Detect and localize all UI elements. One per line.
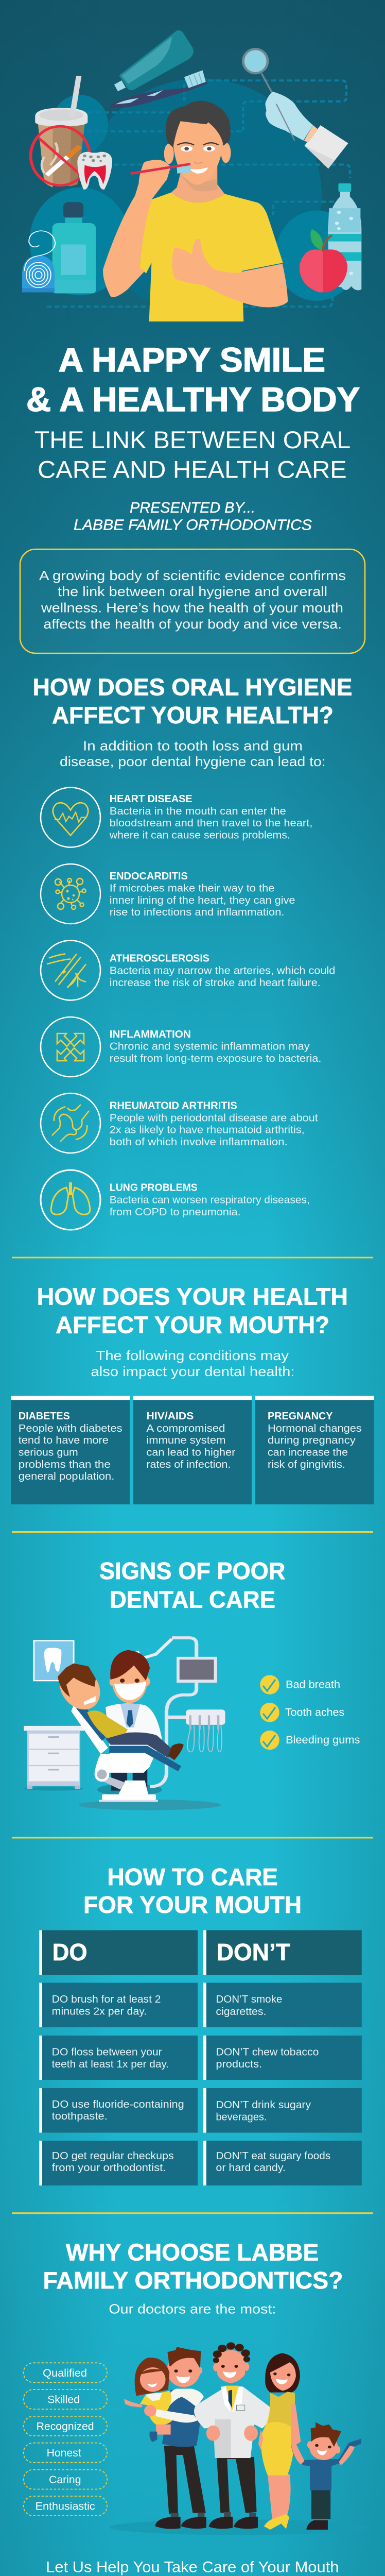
don't row 2 [203, 2036, 362, 2080]
do row 4: from your orthodontist. [52, 2162, 166, 2174]
icon: microbe [41, 864, 100, 924]
text: endocarditis: If microbes make their way to the [110, 882, 274, 894]
pill: skilled [24, 2389, 107, 2409]
check: tooth aches [260, 1703, 344, 1722]
presented by: LABBE FAMILY ORTHODONTICS [74, 517, 312, 534]
icon: joint [41, 1093, 100, 1153]
signs checklist [260, 1675, 360, 1750]
title: & A HEALTHY BODY [26, 380, 360, 418]
text: endocarditis: ENDOCARDITIS [110, 870, 188, 882]
don't row 4 [203, 2141, 362, 2185]
heading: how does your health: HOW DOES YOUR HEALTH [37, 1283, 348, 1310]
family and doctor illustration [109, 2342, 367, 2535]
don't header [203, 1930, 362, 1975]
text: rheumatoid arthritis: both of which involve inflammation. [110, 1136, 288, 1148]
intro callout box [20, 549, 365, 653]
don't row 2: DON’T chew tobacco [216, 2046, 319, 2058]
item: lung problems [41, 1170, 310, 1230]
check: bleeding gums [260, 1731, 360, 1750]
heading: signs of poor dental care: SIGNS OF POOR [99, 1557, 285, 1584]
text: rheumatoid arthritis: RHEUMATOID ARTHRITIS [110, 1100, 237, 1112]
do row 2 [39, 2036, 198, 2080]
heading: how does oral hygiene [33, 674, 352, 728]
pill: recognized [24, 2416, 107, 2436]
do row 1: minutes 2x per day. [52, 2006, 147, 2018]
card: diabetes: problems than the [19, 1459, 111, 1470]
intro callout box: A growing body of scientific evidence confirms [39, 568, 346, 583]
icon: toothpaste tube [114, 30, 194, 91]
icon: dental floss [22, 231, 55, 292]
neck shadow [181, 175, 217, 192]
do row 4: DO get regular checkups [52, 2150, 174, 2162]
heading: how to care for your mouth: FOR YOUR MOUTH [83, 1891, 302, 1918]
card: pregnancy: during pregnancy [268, 1434, 356, 1446]
pill: qualified: Qualified [43, 2367, 87, 2379]
son waving [291, 2422, 361, 2530]
card: pregnancy: can increase the [268, 1447, 348, 1459]
icon: heart [41, 787, 100, 847]
heading: how does oral hygiene: HOW DOES ORAL HYGIENE [33, 674, 352, 701]
do header: DO [52, 1939, 87, 1965]
icon: arteries [41, 940, 100, 1000]
intro text for conditions: In addition to tooth loss and gum [83, 738, 303, 754]
card: diabetes: general population. [19, 1470, 114, 1482]
head [166, 100, 231, 185]
don't row 4: or hard candy. [216, 2162, 286, 2174]
item: heart disease [41, 787, 312, 847]
item: endocarditis [41, 864, 295, 924]
card: diabetes: tend to have more [19, 1434, 109, 1446]
check: bleeding gums: Bleeding gums [286, 1734, 360, 1746]
heading: why choose labbe family orthodontics: FAMILY ORTHODONTICS? [43, 2267, 343, 2294]
wall tooth poster [34, 1641, 74, 1681]
toothbrush in hand [131, 164, 191, 174]
thumbs up arm [172, 239, 288, 307]
title [26, 341, 360, 418]
intro text for conditions: disease, poor dental hygiene can lead to: [60, 754, 326, 769]
card: diabetes: serious gum [19, 1447, 78, 1459]
icon: gloved hand holding dental mirror [242, 48, 348, 168]
card: hiv/aids: HIV/AIDS [146, 1410, 194, 1422]
text: heart disease: HEART DISEASE [110, 793, 192, 805]
heading: how does your health: AFFECT YOUR MOUTH? [56, 1312, 329, 1338]
background blobs [29, 78, 359, 313]
text: atherosclerosis: increase the risk of stroke and heart failure. [110, 977, 321, 989]
neck [171, 163, 225, 202]
don't row 4: DON’T eat sugary foods [216, 2150, 330, 2162]
icon: arrows outward [41, 1017, 100, 1077]
heading: how to care for your mouth [83, 1863, 302, 1918]
do row 3: DO use fluoride-containing [52, 2098, 184, 2110]
pill: enthusiastic: Enthusiastic [36, 2501, 95, 2512]
item: inflammation [41, 1017, 321, 1077]
father holding daughter [124, 2347, 206, 2529]
card: hiv/aids: can lead to higher [146, 1447, 236, 1459]
check: bad breath [260, 1675, 340, 1694]
pill: skilled: Skilled [47, 2394, 80, 2406]
intro text for conditions affecting mouth: The following conditions may [96, 1348, 289, 1363]
doctor [194, 2342, 272, 2529]
card: hiv/aids: immune system [146, 1434, 225, 1446]
title: A HAPPY SMILE [59, 341, 325, 379]
heading: signs of poor dental care: DENTAL CARE [110, 1586, 275, 1613]
don't header: DON’T [217, 1939, 290, 1965]
do row 3: toothpaste. [52, 2110, 108, 2122]
raised arm [103, 160, 171, 297]
do row 1: DO brush for at least 2 [52, 1993, 161, 2005]
text: rheumatoid arthritis: People with periodontal disease are about [110, 1112, 318, 1124]
intro callout box: the link between oral hygiene and overall [58, 584, 327, 599]
pill: caring: Caring [49, 2474, 81, 2486]
intro callout box: affects the health of your body and vice versa. [43, 616, 342, 632]
do row 2: DO floss between your [52, 2046, 162, 2058]
card: pregnancy [255, 1396, 374, 1504]
card: hiv/aids: rates of infection. [146, 1459, 231, 1470]
ground shadow [109, 2519, 367, 2535]
ear [164, 144, 174, 164]
card: pregnancy: PREGNANCY [268, 1410, 333, 1422]
icon: coffee cup with no smoking sign [31, 76, 90, 188]
card: hiv/aids [133, 1396, 252, 1504]
pill: recognized: Recognized [37, 2420, 94, 2432]
presented by [74, 500, 312, 534]
subtitle: CARE AND HEALTH CARE [38, 456, 347, 483]
card: pregnancy: risk of gingivitis. [268, 1459, 345, 1470]
check: tooth aches: Tooth aches [285, 1706, 344, 1719]
heading: how does your health [37, 1283, 348, 1338]
don't row 2: products. [216, 2058, 262, 2070]
intro callout box: wellness. Here’s how the health of your mouth [41, 600, 343, 616]
text: inflammation: Chronic and systemic inflammation may [110, 1041, 310, 1052]
text: atherosclerosis: ATHEROSCLEROSIS [110, 953, 209, 964]
pill: enthusiastic [24, 2496, 107, 2516]
cabinet [24, 1726, 84, 1789]
text: endocarditis: inner lining of the heart, they can give [110, 894, 295, 906]
card: hiv/aids: A compromised [146, 1422, 225, 1434]
intro text for conditions affecting mouth [91, 1348, 294, 1379]
heading: signs of poor dental care [99, 1557, 285, 1613]
hero illustration: man brushing teeth with dental items [22, 30, 361, 321]
pill: honest: Honest [47, 2447, 81, 2459]
text: rheumatoid arthritis [110, 1100, 318, 1148]
mother [258, 2353, 301, 2530]
our doctors text: Our doctors are the most: [109, 2301, 276, 2317]
item: atherosclerosis [41, 940, 335, 1000]
equipment arm and monitor [134, 1638, 225, 1787]
check: bad breath: Bad breath [286, 1679, 340, 1691]
text: atherosclerosis: Bacteria may narrow the arteries, which could [110, 964, 335, 976]
icon: mouthwash bottle [52, 202, 96, 293]
do column [39, 1930, 198, 2185]
text: lung problems: from COPD to pneumonia. [110, 1206, 241, 1218]
text: heart disease [109, 793, 312, 841]
dental chair and patient [52, 1662, 184, 1802]
heading: why choose labbe family orthodontics: WHY CHOOSE LABBE [66, 2239, 319, 2265]
subtitle: THE LINK BETWEEN ORAL [34, 426, 351, 453]
heading: how does oral hygiene: AFFECT YOUR HEALTH? [52, 702, 334, 728]
intro text for conditions [60, 738, 326, 769]
don't row 1 [203, 1982, 362, 2027]
do row 3 [39, 2088, 198, 2133]
pill: qualified [24, 2363, 107, 2382]
closing message: Let Us Help You Take Care of Your Mouth [46, 2558, 339, 2575]
icon: toothbrush [109, 70, 207, 108]
item: rheumatoid arthritis [41, 1093, 318, 1153]
card: diabetes: DIABETES [19, 1410, 70, 1422]
do row 4 [39, 2141, 198, 2185]
dentist [106, 1650, 162, 1791]
do header [39, 1930, 198, 1975]
text: inflammation: result from long-term exposure to bacteria. [110, 1053, 322, 1064]
text: inflammation [110, 1028, 322, 1064]
don't row 3: beverages. [216, 2111, 267, 2123]
don't row 1: cigarettes. [216, 2006, 266, 2018]
intro text for conditions affecting mouth: also impact your dental health: [91, 1364, 294, 1379]
don't column [203, 1930, 362, 2185]
text: lung problems: LUNG PROBLEMS [110, 1182, 198, 1194]
don't row 1: DON’T smoke [216, 1993, 282, 2005]
text: atherosclerosis [110, 953, 335, 989]
text: endocarditis [110, 870, 295, 918]
do row 1 [39, 1982, 198, 2027]
text: inflammation: INFLAMMATION [110, 1028, 191, 1040]
card: pregnancy: Hormonal changes [268, 1422, 362, 1434]
pill: honest [24, 2443, 107, 2463]
man brushing teeth [103, 100, 288, 321]
text: heart disease: bloodstream and then travel to the heart, [110, 817, 312, 829]
card: diabetes [11, 1396, 130, 1504]
icon: apple [300, 229, 347, 292]
text: lung problems: Bacteria can worsen respiratory diseases, [110, 1194, 310, 1206]
presented by: PRESENTED BY... [130, 500, 255, 516]
don't row 3 [203, 2088, 362, 2133]
don't row 3: DON’T drink sugary [216, 2099, 311, 2111]
heading: why choose labbe family orthodontics [43, 2239, 343, 2294]
text: heart disease: Bacteria in the mouth can enter the [110, 805, 286, 817]
icon: decayed tooth [77, 152, 112, 190]
text: lung problems [110, 1182, 310, 1218]
pill: caring [24, 2470, 107, 2489]
icon: water bottle [328, 183, 361, 290]
do row 2: teeth at least 1x per day. [52, 2058, 169, 2070]
dental office illustration [24, 1638, 225, 1810]
yellow shirt [139, 193, 283, 321]
text: endocarditis: rise to infections and inflammation. [110, 906, 285, 918]
card: diabetes: People with diabetes [19, 1422, 122, 1434]
heading: how to care for your mouth: HOW TO CARE [107, 1863, 278, 1890]
qualities list [24, 2363, 107, 2516]
text: rheumatoid arthritis: 2x as likely to have rheumatoid arthritis, [110, 1124, 305, 1136]
floor shadows [24, 1784, 221, 1810]
text: heart disease: where it can cause serious problems. [109, 829, 290, 841]
subtitle [34, 426, 351, 483]
icon: lungs [41, 1170, 100, 1230]
